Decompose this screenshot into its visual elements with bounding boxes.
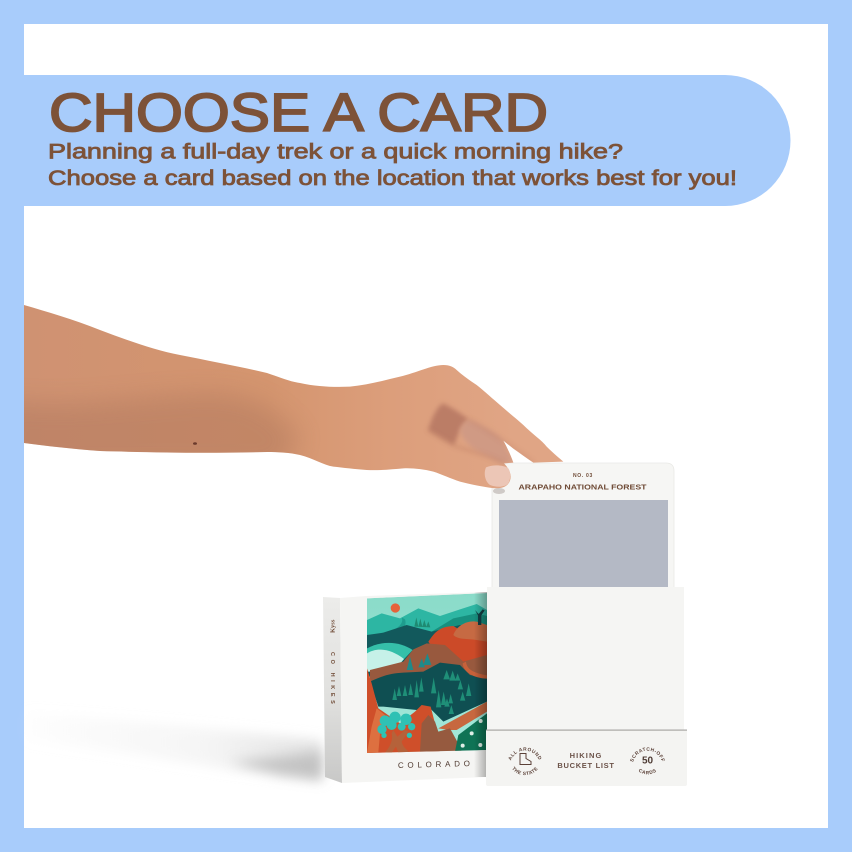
arm and hand outline [24, 305, 563, 488]
band subtitle: BUCKET LIST [557, 761, 615, 770]
flower meadow [455, 713, 487, 752]
far mountains [367, 604, 487, 635]
pale lake [367, 650, 404, 672]
thumb crease [464, 448, 484, 456]
badge number: 50 [642, 756, 653, 766]
winding trail [463, 662, 487, 679]
header banner [24, 75, 790, 206]
band top edge [486, 730, 687, 731]
brown ridge [370, 643, 487, 682]
spine logo: Kyss [330, 619, 336, 633]
river ribbon [396, 618, 406, 628]
badge: all around the state: ALL AROUND [508, 747, 542, 760]
dark ridge [367, 625, 461, 677]
product: Colorado box [323, 592, 487, 783]
card body [492, 463, 674, 590]
flowers [461, 719, 483, 748]
trees far [414, 617, 430, 627]
hollow between finger and thumb [428, 403, 468, 445]
badge: 50 scratch-off cards: CARDS [639, 769, 656, 774]
landscape illustration [367, 593, 487, 753]
shadow on art next to sleeve [474, 592, 487, 777]
banner shape [24, 75, 790, 206]
band title: HIKING [570, 751, 602, 760]
tree trunk [385, 730, 410, 753]
badge: 50 scratch-off cards [630, 747, 665, 774]
badge: all around the state: THE STATE [512, 766, 538, 776]
thumb shadow on card [493, 488, 505, 494]
badge: all around the state [508, 747, 542, 776]
title: CHOOSE A CARD [49, 83, 548, 143]
sleeve band [486, 730, 687, 786]
left red rocks [367, 668, 440, 753]
sky [367, 593, 487, 753]
icon: hiking boot [520, 754, 531, 764]
box label: COLORADO [398, 759, 470, 770]
tree crown [377, 712, 415, 738]
spine label: CO HIKES [329, 652, 335, 707]
index finger lower edge [526, 458, 527, 459]
forearm shadow [24, 392, 296, 454]
sun [391, 603, 400, 613]
card title: ARAPAHO NATIONAL FOREST [518, 482, 647, 492]
red mountain [428, 626, 487, 662]
box front [340, 592, 487, 783]
mid ridge [432, 614, 487, 632]
far blue trees [407, 653, 431, 670]
subtitle line 2: Choose a card based on the location that works best for you! [48, 167, 737, 190]
shading inside hand [0, 393, 533, 470]
forest slope [370, 663, 487, 722]
brown boulders [420, 715, 462, 752]
box sleeve [487, 587, 684, 731]
orange trail [438, 702, 487, 730]
orange peak [453, 621, 487, 642]
subtitle line 1: Planning a full-day trek or a quick morning hike? [48, 140, 623, 163]
hiker [475, 609, 485, 625]
product: scratch-off card [492, 463, 674, 590]
forest trees [392, 670, 471, 714]
badge: 50 scratch-off cards: SCRATCH-OFF [630, 747, 665, 762]
mole [193, 442, 197, 445]
scratch-off area [499, 500, 668, 588]
thumb nail [485, 465, 510, 487]
arm silhouette and detail [0, 305, 563, 488]
orange cliff [367, 708, 385, 753]
floor shadow [26, 712, 322, 780]
card number: NO. 03 [573, 473, 593, 479]
box spine [323, 597, 342, 783]
middle finger [460, 420, 513, 463]
product: Hiking Bucket List box [486, 587, 687, 786]
lake [367, 643, 413, 662]
hand and arm holding the card [0, 305, 563, 488]
